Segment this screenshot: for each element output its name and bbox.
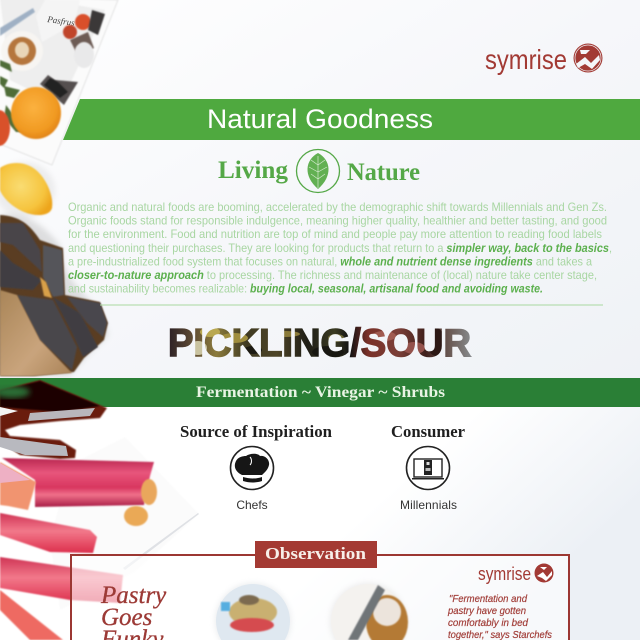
rhubarb stalk 3 <box>0 557 123 603</box>
pickling sour wordmark: PICKLING/SOUR <box>168 322 471 365</box>
title banner <box>63 99 640 140</box>
intro text block: and sustainability becomes realizable: buying local, seasonal, artisanal food and avoiding waste. <box>68 282 543 296</box>
intro text block <box>68 200 612 296</box>
quote <box>447 594 552 640</box>
divider <box>100 304 603 306</box>
consumer column: Millennials <box>400 498 457 512</box>
logo: symrise small: symrise <box>478 564 531 584</box>
photo: rhubarb and syrup <box>0 380 199 640</box>
intro text block: Organic and natural foods are booming, accelerated by the demographic shift towards Millennials and Gen Zs. <box>68 200 607 214</box>
quote: pastry have gotten <box>447 606 526 617</box>
icon: symrise emblem small <box>534 564 554 582</box>
heading: pastry goes funky: Goes <box>101 604 152 631</box>
intro text block: for the environment. Food and nutrition are top of mind and people pay more attention to reading food labels <box>68 227 602 241</box>
red fruit <box>0 110 10 146</box>
icon: leaf <box>296 150 340 192</box>
consumer column: Consumer <box>391 422 465 441</box>
magazine page <box>0 0 118 165</box>
intro text block: Organic foods stand for responsible indulgence, meaning higher quality, healthier and better tasting, and good <box>68 214 607 228</box>
rhubarb stalk 2 <box>0 513 97 553</box>
orange <box>11 87 61 139</box>
magazine page: Pasfrus <box>46 14 76 28</box>
heading: pastry goes funky: Pastry <box>100 582 167 609</box>
photo: crumble with ice cream <box>330 583 408 640</box>
living nature heading <box>218 150 420 192</box>
note card <box>50 437 199 610</box>
living nature heading: Nature <box>347 159 420 186</box>
source of inspiration column: Chefs <box>236 498 268 512</box>
intro text block: and questioning their purchases. They are looking for products that return to a simpler way, back to the basics, <box>68 241 612 255</box>
observation label: Observation <box>265 544 367 563</box>
leaves <box>0 60 26 132</box>
source of inspiration column <box>180 422 332 512</box>
lemon <box>0 162 55 218</box>
quote: comfortably in bed <box>448 618 528 629</box>
intro text block: a pre-industrialized food system that focuses on natural, whole and nutrient dense ingredients and takes a <box>68 254 592 268</box>
photo: magazine with fruit <box>0 0 118 218</box>
icon: symrise emblem <box>574 44 602 72</box>
photo: black garlic <box>0 215 108 376</box>
rhubarb stalk 1 <box>2 458 154 507</box>
living nature heading: Living <box>218 157 288 184</box>
green subheading band: Fermentation ~ Vinegar ~ Shrubs <box>196 384 445 401</box>
logo: symrise top: symrise <box>485 44 567 75</box>
photo: pastry dessert <box>215 583 291 640</box>
observation label <box>255 541 377 568</box>
source of inspiration column: Source of Inspiration <box>180 422 332 441</box>
syrup <box>0 380 107 459</box>
intro text block: closer-to-nature approach to processing. The richness and maintenance of (local) nature take center stage, <box>68 268 597 282</box>
icon: chef hat <box>230 446 274 490</box>
panel: observation <box>71 541 569 640</box>
heading: pastry goes funky <box>100 582 167 640</box>
icon: laptop <box>406 446 450 490</box>
quote: "Fermentation and <box>449 594 527 605</box>
rhubarb stalk 4 <box>0 590 63 640</box>
consumer column <box>391 422 465 512</box>
green subheading band <box>0 378 640 407</box>
title banner: Natural Goodness <box>207 104 433 134</box>
cut stalk <box>0 462 36 510</box>
